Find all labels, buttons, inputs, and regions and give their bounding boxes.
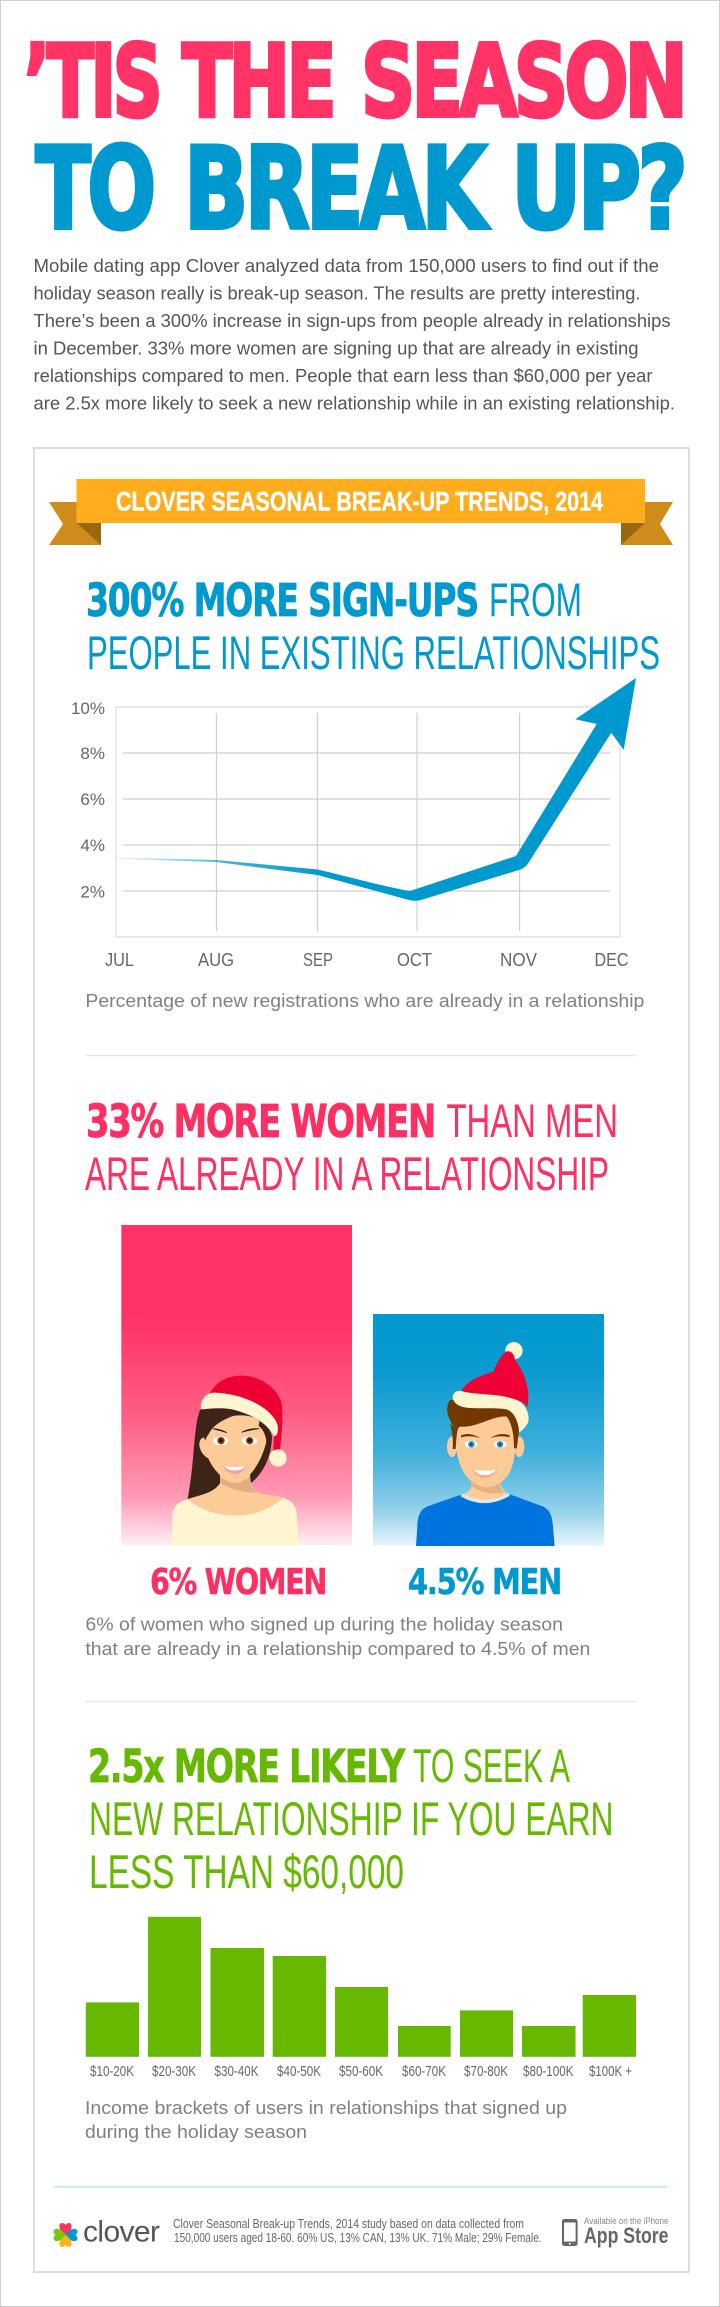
x axis labels bbox=[105, 949, 628, 970]
heading: 2.5x more likely: 2.5x MORE LIKELY bbox=[88, 1740, 406, 1793]
app store badge text: App Store bbox=[584, 2223, 668, 2248]
banner bbox=[49, 479, 673, 545]
bar labels: $80-100K bbox=[523, 2063, 574, 2080]
heading: 300% more sign-ups bbox=[86, 573, 660, 679]
banner text: CLOVER SEASONAL BREAK-UP TRENDS, 2014 bbox=[116, 486, 603, 516]
title bbox=[24, 23, 684, 255]
title line 2: TO bbox=[36, 123, 152, 255]
x axis labels: DEC bbox=[594, 949, 628, 970]
intro text: relationships compared to men. People that earn less than $60,000 per year bbox=[34, 365, 652, 386]
y axis labels: 2% bbox=[80, 882, 105, 902]
intro text bbox=[34, 255, 675, 414]
x axis labels: JUL bbox=[105, 949, 134, 970]
icon: iphone bbox=[562, 2219, 578, 2246]
income caption bbox=[85, 2098, 567, 2142]
intro text: There’s been a 300% increase in sign-ups from people already in relationships bbox=[34, 310, 670, 331]
heading: 2.5x more likely bbox=[88, 1739, 614, 1898]
bar labels: $60-70K bbox=[402, 2063, 446, 2080]
heading: 33% more women bbox=[85, 1094, 618, 1200]
title line 1 bbox=[24, 23, 684, 140]
y axis labels: 4% bbox=[80, 836, 105, 855]
x axis labels: SEP bbox=[303, 949, 333, 970]
app store badge text: Available on the iPhone bbox=[584, 2216, 668, 2227]
y axis labels: 8% bbox=[80, 744, 105, 763]
x axis labels: NOV bbox=[500, 949, 538, 970]
title line 2 bbox=[36, 123, 684, 255]
line chart bbox=[71, 678, 636, 970]
app store badge text bbox=[584, 2216, 668, 2248]
bar labels: $30-40K bbox=[214, 2063, 258, 2080]
icon: clover logo bbox=[54, 2223, 78, 2247]
y axis labels bbox=[71, 699, 105, 902]
bar chart: income brackets bbox=[86, 1917, 636, 2080]
x axis labels: AUG bbox=[198, 949, 234, 970]
label: 4.5% men: 4.5% MEN bbox=[408, 1562, 561, 1603]
footer bbox=[54, 2216, 668, 2248]
heading: 2.5x more likely: LESS THAN $60,000 bbox=[89, 1845, 404, 1898]
bar labels: $40-50K bbox=[277, 2063, 321, 2080]
title line 1: ’TIS bbox=[24, 23, 159, 140]
bar labels bbox=[90, 2063, 632, 2080]
gender caption bbox=[85, 1614, 590, 1659]
label: 6% women: 6% WOMEN bbox=[150, 1562, 326, 1603]
heading: 33% more women: THAN MEN bbox=[446, 1094, 618, 1147]
study note: Clover Seasonal Break-up Trends, 2014 study based on data collected from bbox=[173, 2216, 524, 2231]
y axis labels: 10% bbox=[71, 699, 105, 718]
intro text: are 2.5x more likely to seek a new relationship while in an existing relationship. bbox=[34, 392, 675, 414]
panel: seasonal trends bbox=[34, 448, 689, 2272]
banner left tail bbox=[49, 502, 101, 545]
icon: man in santa hat bbox=[416, 1342, 555, 1546]
bar labels: $100K + bbox=[589, 2063, 632, 2080]
heading: 33% more women: 33% MORE WOMEN bbox=[86, 1095, 435, 1148]
gender caption: that are already in a relationship compared to 4.5% of men bbox=[85, 1639, 590, 1659]
intro text: holiday season really is break-up season. The results are pretty interesting. bbox=[34, 282, 640, 304]
y axis labels: 6% bbox=[80, 790, 105, 809]
title line 1: THE bbox=[182, 23, 333, 140]
bar labels: $20-30K bbox=[152, 2063, 196, 2080]
income caption: Income brackets of users in relationships that signed up bbox=[85, 2098, 567, 2118]
clover wordmark: clover bbox=[83, 2216, 160, 2248]
intro text: in December. 33% more women are signing up that are already in existing bbox=[34, 338, 638, 358]
study note bbox=[173, 2216, 542, 2245]
arrow: growth line bbox=[114, 678, 636, 901]
bar: men with portrait bbox=[373, 1314, 604, 1546]
gender caption: 6% of women who signed up during the holiday season bbox=[85, 1614, 563, 1634]
bar labels: $50-60K bbox=[339, 2063, 383, 2080]
intro text: Mobile dating app Clover analyzed data from 150,000 users to find out if the bbox=[34, 255, 659, 276]
chart caption: Percentage of new registrations who are already in a relationship bbox=[85, 991, 644, 1011]
banner right tail bbox=[621, 502, 673, 545]
income caption: during the holiday season bbox=[85, 2122, 307, 2142]
icon: woman in santa hat bbox=[171, 1376, 299, 1546]
heading: 300% more sign-ups: 300% MORE SIGN-UPS bbox=[86, 574, 478, 627]
bar labels: $10-20K bbox=[90, 2063, 134, 2080]
heading: 2.5x more likely: TO SEEK A bbox=[413, 1739, 570, 1792]
x axis labels: OCT bbox=[397, 949, 432, 970]
study note: 150,000 users aged 18-60. 60% US, 13% CAN, 13% UK. 71% Male; 29% Female. bbox=[174, 2230, 542, 2245]
heading: 300% more sign-ups: FROM bbox=[489, 573, 582, 626]
title line 2: BREAK bbox=[184, 123, 489, 255]
bar labels: $70-80K bbox=[464, 2063, 508, 2080]
bar: women with portrait bbox=[121, 1225, 352, 1546]
